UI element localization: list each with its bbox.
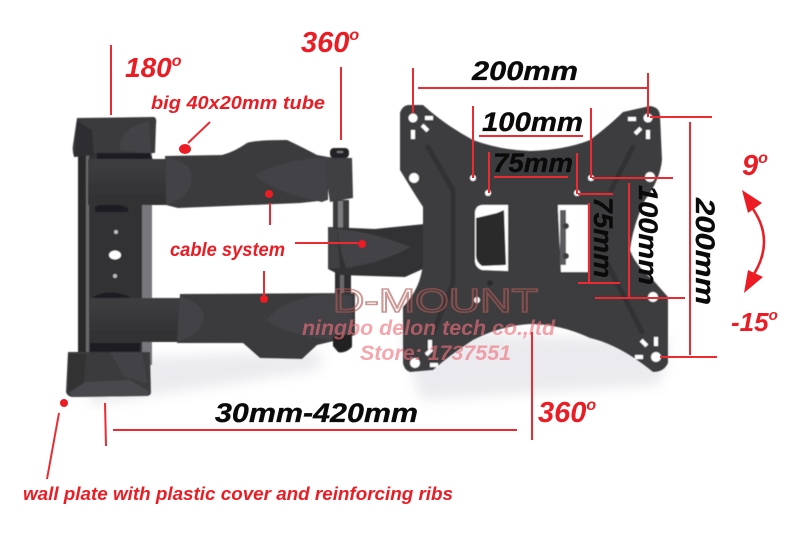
callout dots (60, 144, 366, 407)
label: 360 degrees top: o (349, 27, 359, 44)
label: 75mm horizontal: 75mm (493, 148, 573, 178)
bottom cover cap (66, 343, 151, 397)
watermark (302, 282, 556, 365)
watermark: store: Store: 1737551 (360, 342, 511, 365)
label: 360 degrees top: 360 (301, 27, 349, 59)
label: 75mm vertical: 75mm (588, 197, 618, 278)
watermark: company: ningbo delon tech co.,ltd (302, 317, 556, 340)
icon: tilt arrow (742, 190, 764, 293)
label: 200mm horizontal: 200mm (471, 56, 578, 86)
callout lines: arm (47, 45, 532, 479)
label: 180 degrees: 180 (125, 52, 172, 83)
top arm (88, 140, 353, 208)
top cover cap (73, 117, 156, 160)
label: tilt down: -15 (731, 307, 769, 337)
watermark: brand name: D-MOUNT (333, 282, 538, 319)
label: 200mm vertical: 200mm (690, 197, 720, 305)
label: extension range: 30mm-420mm (215, 398, 418, 428)
label: 360 degrees bottom: o (586, 397, 596, 414)
label: tube: big 40x20mm tube (151, 93, 325, 113)
mounting windows (475, 205, 508, 271)
label: wall plate: wall plate with plastic cover and reinforcing ribs (23, 484, 453, 504)
label: 360 degrees bottom: 360 (538, 397, 586, 429)
label: tilt down: o (769, 307, 778, 324)
label: 100mm horizontal: 100mm (482, 107, 583, 137)
mount photo drawing (66, 105, 670, 405)
holes and slots (408, 114, 661, 368)
dimension lines: plate (413, 68, 717, 357)
label: tilt up: o (758, 150, 768, 167)
label: tilt up: 9 (742, 150, 758, 182)
VESA plate (400, 105, 668, 372)
label: 180 degrees: o (172, 53, 182, 70)
rib channels (428, 147, 453, 333)
label: 100mm vertical: 100mm (633, 185, 663, 285)
bottom arm (90, 293, 355, 359)
soft shadow (90, 330, 670, 405)
wall plate (78, 150, 152, 365)
label: cable system: cable system (170, 240, 285, 261)
swivel post (333, 200, 351, 298)
center swivel bracket (328, 224, 425, 277)
